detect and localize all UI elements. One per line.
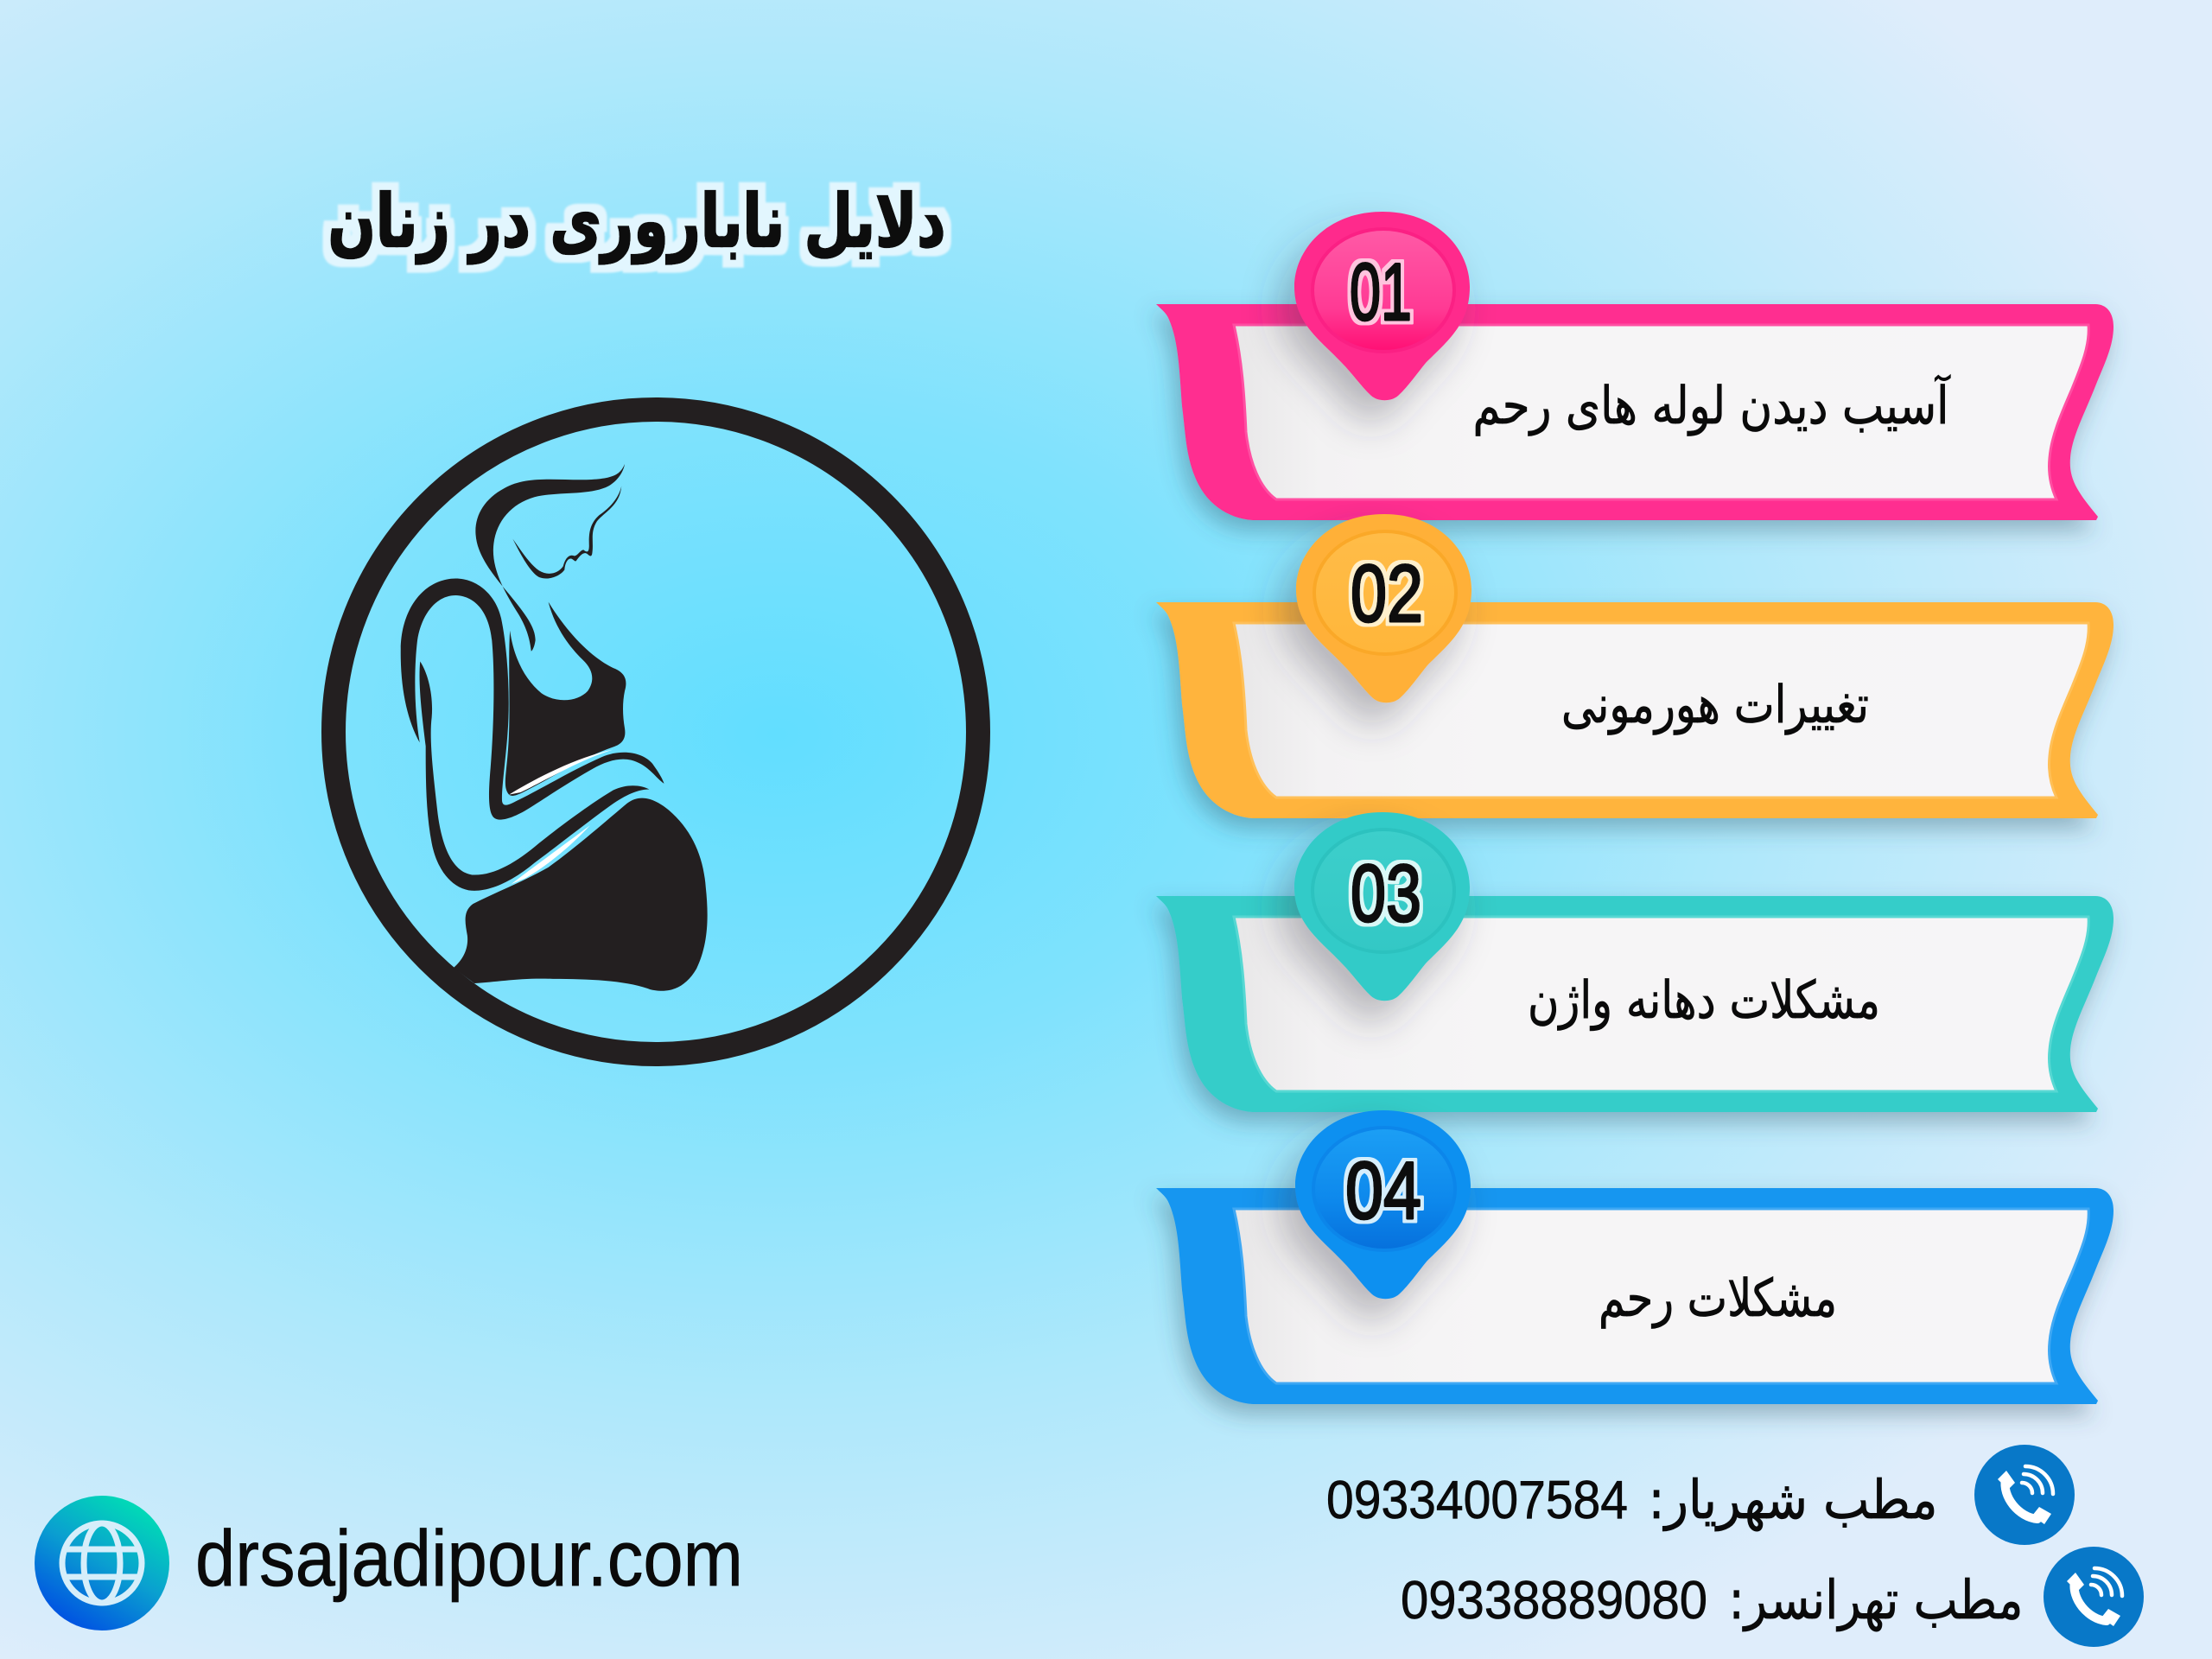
contact: shahriar	[1326, 1445, 2075, 1545]
pin 04	[1295, 1110, 1471, 1299]
card 2 text: تغییرات هورمونی	[1561, 675, 1869, 735]
contact: tehransar	[1401, 1547, 2144, 1647]
card 1	[1156, 212, 2113, 520]
card 4 text: مشکلات رحم	[1599, 1268, 1837, 1329]
icon: phone 2	[2044, 1547, 2144, 1647]
clinic label 2: مطب تهرانسر:	[1728, 1568, 2024, 1632]
icon: phone 1	[1974, 1445, 2075, 1545]
silhouette	[401, 464, 708, 991]
icon: globe	[35, 1496, 169, 1630]
pin 01	[1294, 212, 1470, 400]
card 4	[1156, 1110, 2113, 1404]
website: drsajadipour.com	[195, 1515, 743, 1603]
phone number 1: 09334007584	[1326, 1471, 1628, 1530]
card 1 text: آسیب دیدن لوله های رحم	[1472, 374, 1950, 436]
pin 02	[1296, 514, 1471, 702]
pin 04: 04	[1345, 1145, 1421, 1236]
phone number 2: 09338889080	[1401, 1571, 1707, 1630]
clinic label 1: مطب شهریار:	[1649, 1468, 1937, 1532]
card 3 text: مشکلات دهانه واژن	[1528, 970, 1880, 1031]
icon: pregnant woman in circle	[334, 410, 978, 1054]
pin 03: 03	[1351, 848, 1421, 938]
card 3	[1156, 812, 2113, 1112]
pin 02: 02	[1351, 548, 1423, 639]
pin 03	[1294, 812, 1470, 1001]
card 2	[1156, 514, 2113, 818]
title: دلایل ناباروری در زنان	[328, 179, 945, 264]
pin 01: 01	[1350, 246, 1412, 337]
